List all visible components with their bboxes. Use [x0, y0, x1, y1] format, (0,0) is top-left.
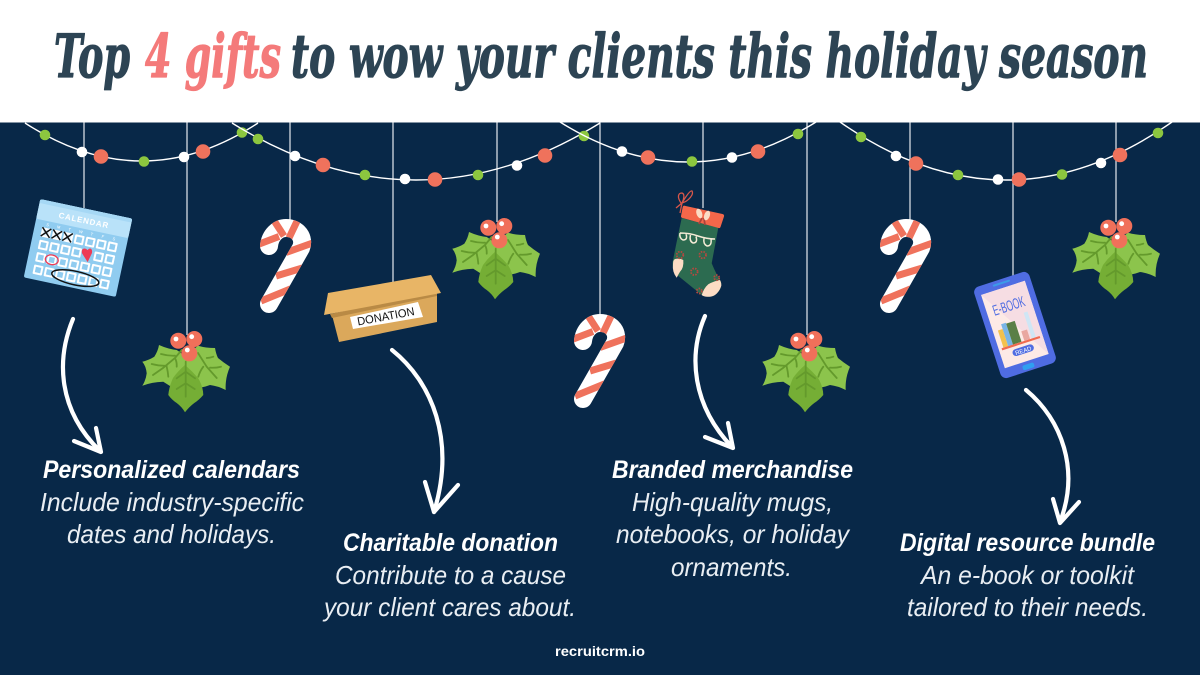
icon: holly 2: [452, 218, 540, 299]
text block: digital resource bundle: [900, 529, 1155, 622]
footer brand: recruitcrm.io: [555, 643, 645, 659]
icon: donation box: [324, 275, 441, 342]
icon: candy cane 1: [258, 217, 314, 304]
garland 3: [560, 122, 816, 167]
text block: charitable donation: Charitable donation: [343, 529, 558, 557]
icon: candy cane 2: [572, 312, 628, 399]
text block: personalized calendars: dates and holidays.: [67, 519, 276, 549]
text block: charitable donation: Contribute to a cause: [335, 560, 566, 590]
text block: branded merchandise: ornaments.: [671, 552, 792, 582]
icon: e-book tablet: [973, 270, 1057, 380]
garland 2: [232, 123, 600, 187]
icon: calendar: M: [57, 224, 61, 230]
icon: candy cane 3: [878, 217, 934, 304]
header band: [0, 0, 1200, 122]
text block: digital resource bundle: Digital resource bundle: [900, 529, 1155, 557]
title: Top: [54, 22, 130, 92]
icon: calendar: T: [68, 227, 72, 232]
icon: calendar: CALENDAR: [58, 211, 110, 230]
icon: holly 3: [762, 331, 850, 412]
text block: digital resource bundle: tailored to their needs.: [907, 592, 1148, 622]
icon: e-book tablet: READ: [1015, 346, 1033, 357]
icon: donation box: DONATION: [356, 306, 416, 328]
text block: branded merchandise: [612, 456, 853, 582]
garland 4: [840, 122, 1172, 187]
icon: calendar: F: [101, 234, 105, 239]
garland 1: [25, 123, 258, 167]
icon: calendar: T: [90, 231, 94, 237]
icon: calendar: S: [46, 222, 50, 227]
text block: charitable donation: your client cares about.: [322, 592, 576, 622]
text block: branded merchandise: Branded merchandise: [612, 456, 853, 484]
title: 4 gifts: [145, 22, 281, 92]
arrow: calendars: [63, 319, 101, 452]
icon: calendar: W: [78, 229, 83, 235]
arrow: resource bundle: [1026, 390, 1079, 523]
text block: personalized calendars: Include industry-specific: [40, 487, 304, 517]
icon: calendar: [24, 199, 132, 297]
icon: e-book tablet: E-BOOK: [991, 293, 1027, 320]
icon: stocking: [673, 191, 724, 297]
hanging strings: [84, 122, 1116, 335]
icon: holly 4: [1072, 218, 1160, 299]
text block: branded merchandise: notebooks, or holiday: [616, 519, 851, 549]
arrow: donation: [392, 350, 458, 512]
text block: personalized calendars: [40, 456, 304, 549]
text block: branded merchandise: High-quality mugs,: [632, 487, 833, 517]
text block: personalized calendars: Personalized calendars: [43, 456, 300, 484]
arrow: merchandise: [696, 316, 733, 448]
text block: charitable donation: [322, 529, 576, 622]
icon: calendar: S: [112, 236, 116, 242]
text block: digital resource bundle: An e-book or toolkit: [919, 560, 1136, 590]
icon: holly 1: [142, 331, 230, 412]
